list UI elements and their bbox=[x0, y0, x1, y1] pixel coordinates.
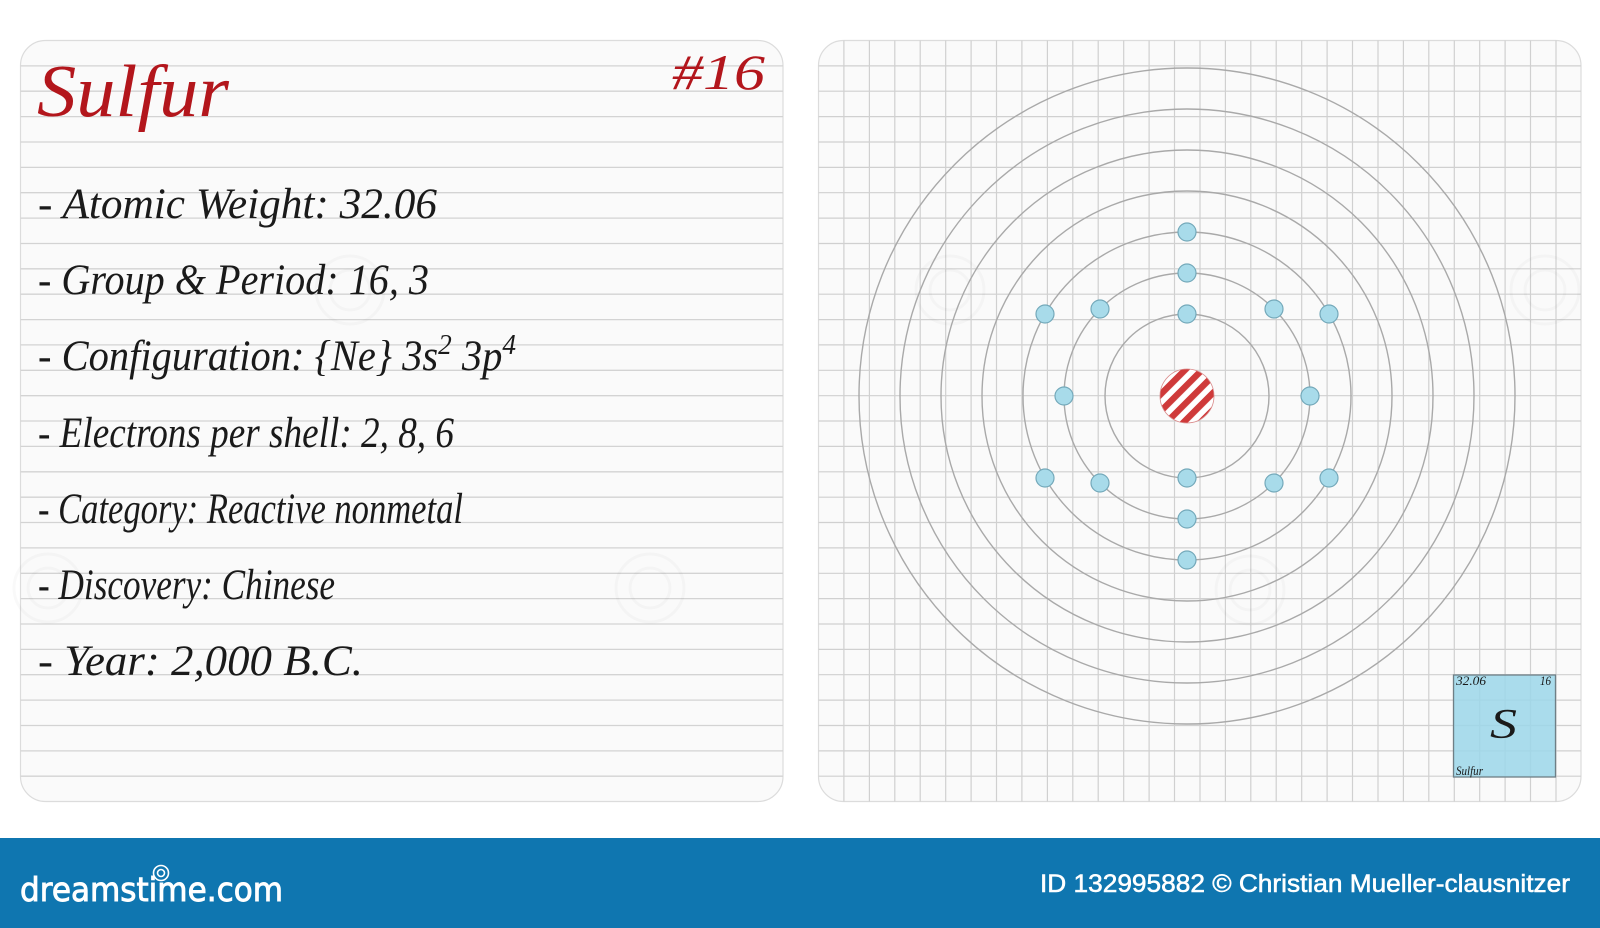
tile: name: Sulfur bbox=[1456, 763, 1484, 778]
text: configuration: 2 bbox=[438, 329, 452, 361]
icon: logo spiral bbox=[154, 866, 168, 880]
tile: atomic number: 16 bbox=[1540, 673, 1551, 688]
text: configuration: 3p bbox=[452, 333, 502, 380]
tile: symbol: S bbox=[1490, 702, 1517, 748]
tile: atomic weight: 32.06 bbox=[1455, 673, 1487, 688]
electrons: shell 1, 2 and 3 bbox=[1036, 223, 1338, 569]
panel: atom diagram on graph paper bbox=[818, 40, 1581, 802]
text: configuration: 4 bbox=[502, 329, 516, 361]
text: configuration: - Configuration: {Ne} 3s bbox=[38, 333, 463, 380]
text: year: - Year: 2,000 B.C. bbox=[38, 638, 363, 685]
text: electrons per shell: - Electrons per shell: 2, 8, 6 bbox=[38, 410, 454, 457]
card: periodic table tile bbox=[1454, 673, 1556, 778]
footer: logo wordmark: dreamstime.com bbox=[20, 870, 283, 909]
text: atomic weight: - Atomic Weight: 32.06 bbox=[38, 181, 437, 228]
heading: element name: Sulfur bbox=[37, 51, 230, 133]
text: group and period: - Group & Period: 16, 3 bbox=[38, 257, 429, 304]
icon: striped nucleus bbox=[1160, 369, 1214, 423]
footer: image credit: ID 132995882 © Christian Mueller-clausnitzer bbox=[1040, 870, 1570, 898]
panel: element facts notebook page bbox=[14, 40, 783, 802]
text: category: - Category: Reactive nonmetal bbox=[38, 486, 463, 533]
chart: electron shells bbox=[859, 68, 1515, 724]
footer band bbox=[0, 838, 1600, 928]
heading: atomic number: #16 bbox=[672, 44, 765, 100]
text: discovery: - Discovery: Chinese bbox=[38, 562, 335, 609]
